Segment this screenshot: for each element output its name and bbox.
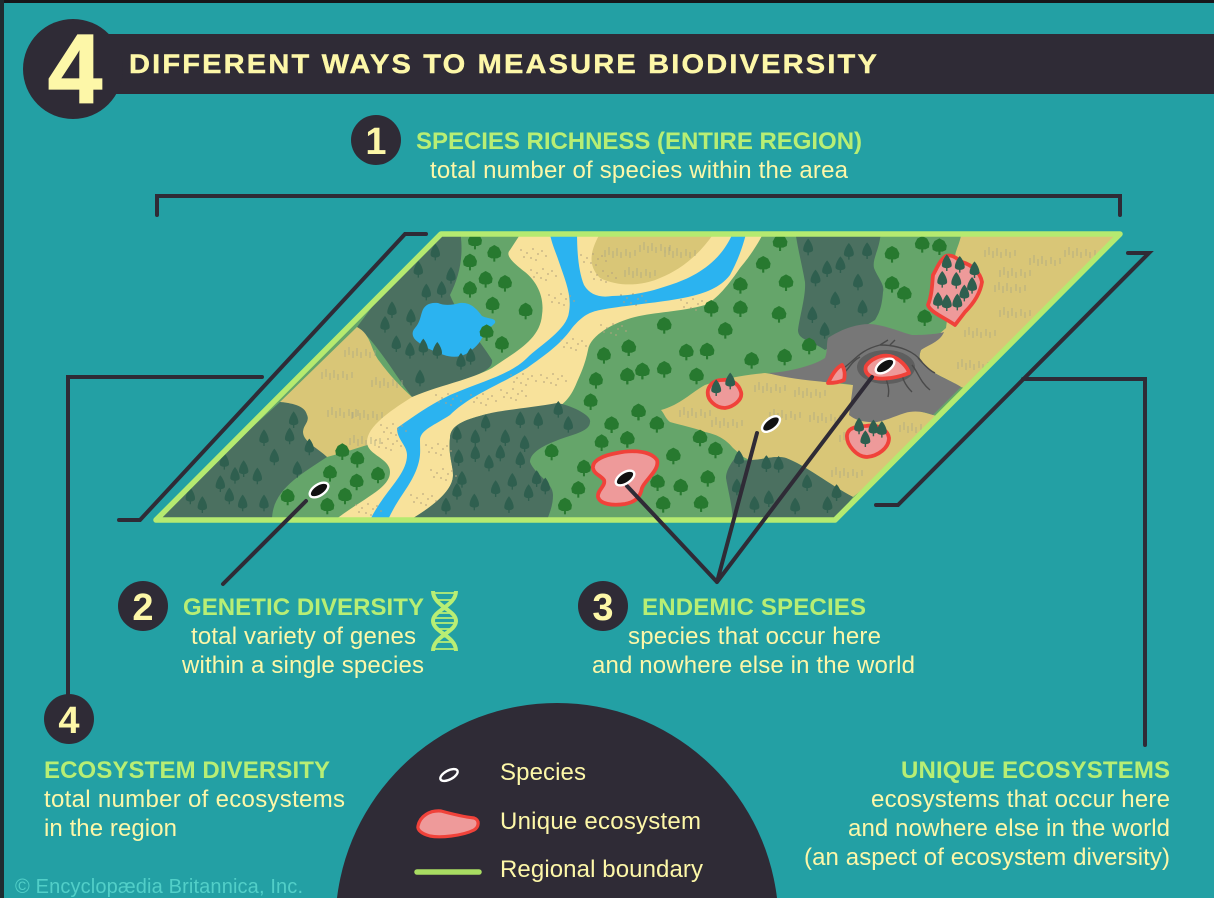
terrain: left grassland — [280, 327, 412, 457]
terrain: river — [370, 230, 747, 520]
callout 4: ecosystem diversity: 4 — [58, 700, 80, 742]
terrain: lake — [413, 303, 495, 357]
callout 1: species richness: total number of species within the area — [430, 157, 849, 184]
callout 2: genetic diversity: total variety of genes — [191, 623, 416, 650]
icon: DNA helix — [433, 591, 456, 651]
legend label: unique ecosystem: Unique ecosystem — [500, 808, 701, 835]
title number: 4 — [48, 14, 102, 124]
terrain: upper-left forest — [357, 230, 492, 397]
bracket: entire region — [157, 196, 1120, 215]
legend icon: unique ecosystem — [418, 811, 478, 837]
callout: unique ecosystems — [804, 757, 1170, 871]
callout 4: ecosystem diversity: in the region — [44, 815, 177, 842]
terrain: right grassland — [920, 236, 1114, 388]
terrain: top grass hill — [592, 236, 712, 284]
round trees — [281, 233, 649, 514]
callout 1: species richness: 1 — [365, 121, 387, 163]
callout 3: endemic species: ENDEMIC SPECIES — [642, 594, 866, 621]
title banner — [23, 14, 1214, 124]
terrain: crater — [838, 340, 935, 397]
callout: unique ecosystems: ecosystems that occur here — [871, 786, 1170, 813]
species markers on map — [307, 356, 897, 500]
leader lines to species markers — [223, 377, 872, 584]
map: regional landscape — [150, 230, 1130, 525]
callout 2: genetic diversity: GENETIC DIVERSITY — [183, 594, 424, 621]
callout: unique ecosystems: (an aspect of ecosystem diversity) — [804, 844, 1170, 871]
title text: DIFFERENT WAYS TO MEASURE BIODIVERSITY — [129, 49, 879, 79]
copyright: © Encyclopædia Britannica, Inc. — [15, 876, 303, 898]
grass and sand texture — [322, 242, 1095, 515]
callout 1: species richness: SPECIES RICHNESS (ENTIRE REGION) — [416, 128, 862, 155]
bracket: right ecosystem leader — [876, 253, 1149, 745]
legend icon: regional boundary — [417, 869, 479, 875]
callout 3: endemic species: 3 — [592, 587, 614, 629]
callout 2: genetic diversity: 2 — [132, 587, 154, 629]
round trees right — [604, 234, 947, 513]
callout: unique ecosystems: and nowhere else in the world — [848, 815, 1170, 842]
callout 4: ecosystem diversity: total number of ecosystems — [44, 786, 345, 813]
callout 3: endemic species: and nowhere else in the world — [592, 652, 915, 679]
legend icon: species — [438, 767, 460, 783]
callout 4: ecosystem diversity: ECOSYSTEM DIVERSITY — [44, 757, 330, 784]
terrain: lower-right forest — [726, 457, 853, 520]
callout 3: endemic species: species that occur here — [628, 623, 881, 650]
callout 2: genetic diversity — [118, 581, 424, 679]
legend label: regional boundary: Regional boundary — [500, 856, 703, 883]
unique ecosystem patches — [593, 255, 982, 505]
conifers right — [711, 239, 979, 514]
bracket: left ecosystem leader — [68, 234, 426, 695]
regional boundary outline — [156, 234, 1120, 520]
callout 4: ecosystem diversity — [44, 694, 345, 842]
conifers left — [186, 244, 573, 514]
terrain: lower-left forest — [150, 402, 327, 520]
legend label: species: Species — [500, 759, 586, 786]
terrain: lower-centre forest — [410, 403, 590, 520]
terrain: central grassland — [661, 373, 950, 497]
terrain: sandy river banks — [335, 230, 765, 520]
terrain: upper-right forest — [795, 230, 883, 350]
callout 3: endemic species — [578, 581, 915, 679]
callout 1: species richness — [351, 115, 862, 184]
callout: unique ecosystems: UNIQUE ECOSYSTEMS — [901, 757, 1170, 784]
terrain: volcanic rock — [768, 324, 961, 422]
callout 2: genetic diversity: within a single species — [181, 652, 424, 679]
legend panel — [337, 703, 777, 898]
